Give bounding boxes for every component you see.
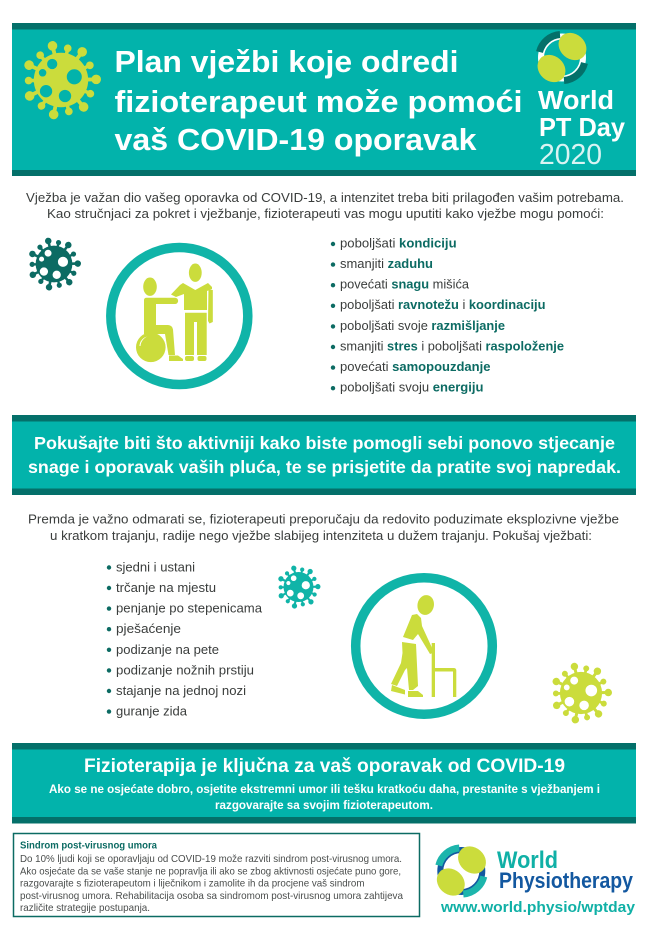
list: benefits of exercise: povećati snagu mišića [340,277,470,292]
icon: dark green virus [21,231,86,295]
panel: activity banner: snage i oporavak vaših pluća, te se prisjetite da pratite svoj napredak. [28,457,621,477]
title: Plan vježbi koje odredi [114,44,458,79]
panel: header banner [12,23,636,176]
panel: post-viral fatigue syndrome: Sindrom post-virusnog umora [20,840,157,852]
panel: post-viral fatigue syndrome: post-virusnog umora. Rehabilitacija osoba sa sindromom post-virusnog umora zahtijeva [20,891,403,902]
list: exercises: podizanje na pete [116,642,219,657]
panel: post-viral fatigue syndrome: razgovarajte s fizioterapeutom i liječnikom i zamolite ih da procjene vaš sindrom [20,878,364,890]
list: exercises: guranje zida [116,704,188,719]
text: exercise recommendation: Premda je važno odmarati se, fizioterapeuti preporučaju da redovito poduzimate eksplozivne vježbe [28,512,619,526]
panel: post-viral fatigue syndrome: različite strategije postupanja. [20,903,150,914]
panel: key message banner [12,743,636,824]
logo: World Physiotherapy: www.world.physio/wptday [440,899,636,916]
panel: key message banner: Ako se ne osjećate dobro, osjetite ekstremni umor ili tešku kratkoću daha, prestanite s vježbanjem i [49,782,600,796]
list: benefits of exercise: povećati samopouzdanje [340,359,490,374]
list: benefits of exercise: poboljšati kondiciju [340,236,457,250]
list: exercises: podizanje nožnih prstiju [116,662,254,677]
list: exercises: trčanje na mjestu [116,580,216,595]
intro text: Vježba je važan dio vašeg oporavka od COVID-19, a intenzitet treba biti prilagođen vašim potrebama. [26,190,624,205]
icon: yellow virus [12,31,109,127]
title: fizioterapeut može pomoći [114,84,522,119]
panel: key message banner: razgovarajte sa svojim fizioterapeutom. [215,798,433,812]
logo: World PT Day 2020 [532,27,626,171]
list: benefits of exercise: poboljšati svoju energiju [340,380,484,395]
icon: person with walking frame [356,578,492,714]
logo: World PT Day 2020: PT Day [539,112,626,142]
panel: activity banner [12,415,636,495]
title: vaš COVID-19 oporavak [114,122,477,157]
logo: World Physiotherapy: World [497,847,558,874]
intro text [26,190,624,221]
panel: post-viral fatigue syndrome [14,834,420,916]
text: exercise recommendation [28,512,619,543]
list: benefits of exercise: smanjiti zaduhu [340,256,433,271]
logo: World Physiotherapy [431,841,636,916]
list: benefits of exercise: smanjiti stres i poboljšati raspoloženje [340,338,564,353]
logo: World PT Day 2020: World [538,87,614,115]
icon: lime virus [543,655,618,729]
panel: key message banner: Fizioterapija je ključna za vaš oporavak od COVID-19 [84,755,565,777]
panel: post-viral fatigue syndrome: Do 10% ljudi koji se oporavljaju od COVID-19 može razviti sindrom post-virusnog umora. [20,854,402,865]
title [114,44,522,157]
list: benefits of exercise: poboljšati svoje razmišljanje [340,318,505,333]
icon: physiotherapist with patient on exercise ball [111,248,248,384]
panel: activity banner: Pokušajte biti što aktivniji kako biste pomogli sebi ponovo stjecanje [34,433,615,453]
list: benefits of exercise: poboljšati ravnotežu i koordinaciju [340,297,546,312]
panel: post-viral fatigue syndrome: Ako osjećate da se vaše stanje ne popravlja ili ako se zbog aktivnosti osjećate puno gore, [20,866,401,878]
intro text: Kao stručnjaci za pokret i vježbanje, fizioterapeuti vas mogu uputiti kako vježbe mogu pomoći: [47,206,604,221]
list: exercises: penjanje po stepenicama [116,601,263,616]
list: exercises: sjedni i ustani [116,560,195,574]
text: exercise recommendation: u kratkom trajanju, radije nego vježbe slabijeg intenziteta u dužem trajanju. Pokušaj vježbati: [50,528,592,543]
icon: teal virus [272,560,325,613]
list: exercises: pješaćenje [116,621,181,636]
list: benefits of exercise [331,236,564,395]
logo: World PT Day 2020: 2020 [539,139,602,171]
list: exercises: stajanje na jednoj nozi [116,683,246,698]
list: exercises [107,560,263,719]
